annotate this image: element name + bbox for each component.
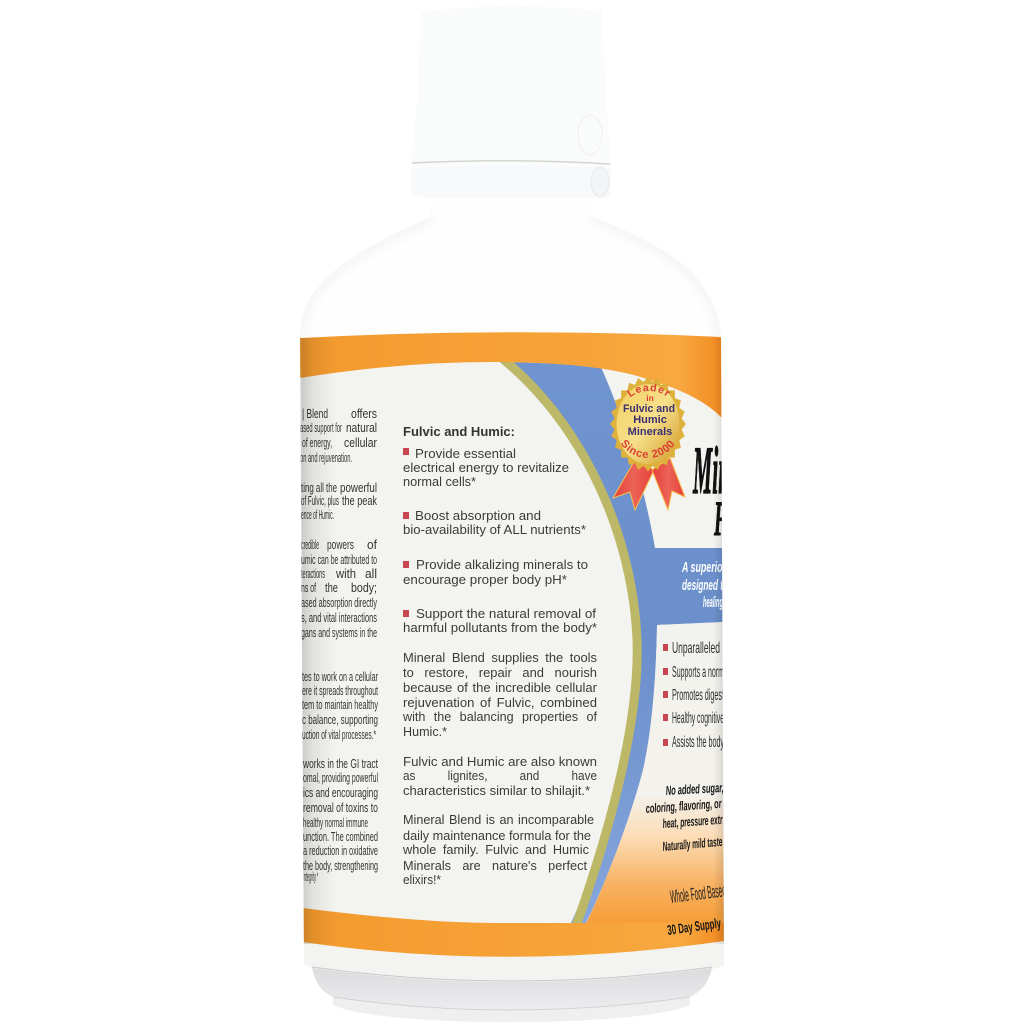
bullet list: electrical energy to revitalize	[403, 460, 569, 475]
left text column: compressed around bottle curve: with	[335, 567, 356, 581]
left text column: compressed around bottle curve: the	[325, 581, 338, 595]
paragraph: lignites: as lignites, and have	[403, 768, 597, 783]
starburst	[610, 376, 686, 472]
paragraph: tools to restore: Humic.*	[403, 724, 447, 739]
olive curved stripe	[504, 360, 637, 926]
left text column: compressed around bottle curve: integrity.*	[303, 870, 318, 884]
bullet list: Support the natural removal of	[416, 606, 596, 621]
bottle cap with shrink seal	[412, 114, 610, 198]
label background panel	[300, 340, 724, 945]
left text column: compressed around bottle curve: of	[367, 538, 377, 552]
left text column: compressed around bottle curve: ence of Humic.	[301, 508, 334, 522]
paragraph: lignites	[403, 754, 597, 798]
left text column: compressed around bottle curve: omal, providing powerful	[303, 771, 378, 785]
paragraph: lignites: Fulvic and Humic are also known	[403, 754, 597, 769]
blue swoosh band	[500, 362, 723, 925]
bottle body: healing	[703, 594, 723, 611]
left text column: compressed around bottle curve: tes to work on a cellular	[302, 670, 378, 684]
paragraph: tools to restore	[402, 650, 598, 739]
heading: Fulvic and Humic: Fulvic and Humic:	[403, 425, 515, 439]
left text column: compressed around bottle curve: all	[365, 567, 377, 581]
left text column: compressed around bottle curve: gans and systems in the	[301, 626, 377, 640]
left text column: compressed around bottle curve: ting all the	[301, 481, 337, 495]
left text column: compressed around bottle curve: powerful	[340, 481, 377, 495]
left text column: compressed around bottle curve: powers	[327, 538, 354, 552]
benefits list	[663, 640, 724, 751]
paragraph: daily maintenance: daily maintenance formula for the	[403, 828, 591, 843]
bullet list: normal cells*	[403, 474, 476, 489]
benefits list: Unparalleled	[672, 640, 720, 657]
bottle body: Assists the body	[672, 734, 724, 751]
paragraph: daily maintenance	[402, 812, 594, 887]
paragraph: tools to restore: because of the incredible cellular	[403, 680, 598, 695]
bullet list: bio-availability of ALL nutrients*	[403, 522, 586, 537]
award badge seal: Fulvic and	[623, 403, 675, 415]
left text column: compressed around bottle curve: body;	[351, 581, 377, 595]
left text column: compressed around bottle curve: offers	[351, 407, 377, 421]
left text column: compressed around bottle curve: ere it spreads throughout	[302, 684, 378, 698]
bottle body: Whole Food Based	[669, 880, 727, 907]
paragraph: lignites: characteristics similar to shilajit.*	[403, 783, 590, 798]
paragraph: daily maintenance: whole family. Fulvic and Humic	[402, 842, 589, 857]
left text column: compressed around bottle curve	[300, 407, 378, 884]
gold disk	[616, 384, 680, 464]
no added sugar statement: Naturally mild taste	[662, 834, 723, 854]
left text column: compressed around bottle curve: of energy,	[302, 436, 332, 450]
center text column	[402, 425, 598, 887]
whole food and supply lines	[667, 886, 724, 935]
left text column: compressed around bottle curve: healthy normal immune	[303, 816, 368, 830]
bottom orange band	[303, 908, 724, 957]
no added sugar statement: heat, pressure extr	[662, 812, 724, 831]
paragraph: daily maintenance: elixirs!*	[403, 872, 441, 887]
left text column: compressed around bottle curve: credible	[301, 538, 319, 552]
bullet list: harmful pollutants from the body*	[403, 620, 597, 635]
left text column: compressed around bottle curve: the body, strengthening	[303, 859, 378, 873]
left text column: compressed around bottle curve: teractions	[301, 567, 325, 581]
left text column: compressed around bottle curve: cellular	[344, 436, 377, 450]
paragraph: tools to restore: with the balancing properties of	[402, 709, 597, 724]
left text column: compressed around bottle curve: | Blend	[302, 407, 328, 421]
paragraph: tools to restore: rejuvenation of Fulvic, combined	[403, 695, 597, 710]
left text column: compressed around bottle curve: works in the GI tract	[302, 757, 378, 771]
bottle product photo	[300, 114, 724, 1022]
paragraph: tools to restore: to restore, repair and nourish	[403, 665, 597, 680]
left text column: compressed around bottle curve: ics and encouraging	[303, 786, 378, 800]
bottle body: Healthy cognitive	[672, 710, 724, 727]
left text column: compressed around bottle curve: natural	[346, 421, 377, 435]
curvature shading on label	[298, 338, 726, 944]
bullet list: Boost absorption and	[415, 508, 541, 523]
left text column: compressed around bottle curve: ased absorption directly	[301, 596, 377, 610]
left text column: compressed around bottle curve: the peak	[342, 494, 378, 508]
left text column: compressed around bottle curve: ased support for	[300, 421, 342, 435]
blue panel tagline: A superior	[681, 559, 727, 576]
left text column: compressed around bottle curve: a reduction in oxidative	[303, 844, 378, 858]
left text column: compressed around bottle curve: of Fulvic, plus	[301, 494, 339, 508]
left text column: compressed around bottle curve: unction. The combined	[303, 830, 378, 844]
award badge seal: Minerals	[628, 426, 672, 438]
award badge seal: Since 2000	[621, 440, 674, 458]
bottle body: Promotes digest	[672, 687, 724, 704]
bullet list: Provide essential	[415, 446, 516, 461]
left text column: compressed around bottle curve: tem to maintain healthy	[302, 698, 378, 712]
bottle shoulder	[300, 199, 721, 340]
top orange band	[300, 332, 722, 418]
left text column: compressed around bottle curve: c balance, supporting	[302, 713, 378, 727]
product title, wrapping out of view	[692, 445, 722, 536]
left text column: compressed around bottle curve: removal of toxins to	[303, 801, 378, 815]
paragraph: daily maintenance: Minerals are nature's perfect	[403, 858, 587, 873]
award badge seal: in	[646, 393, 654, 403]
bottle body	[300, 114, 724, 1022]
no added sugar statement: coloring, flavoring, or	[645, 796, 723, 816]
bottle base	[304, 940, 724, 1022]
seal text: Leader	[626, 384, 670, 397]
bottle product photo: Mineral	[693, 432, 765, 508]
paragraph: tools to restore: Mineral Blend supplies the tools	[403, 650, 597, 665]
whole food and supply lines: 30 Day Supply	[666, 915, 722, 938]
bottle body: Supports a norm	[672, 664, 724, 681]
no added sugar statement	[645, 780, 724, 854]
left text column: compressed around bottle curve: uction of vital processes.*	[302, 728, 376, 742]
left text column: compressed around bottle curve: umic can be attributed to	[301, 553, 377, 567]
blue panel tagline: designed to	[682, 577, 728, 594]
blue panel tagline	[682, 561, 722, 610]
left text column: compressed around bottle curve: ns of	[301, 581, 316, 595]
bullet list	[403, 446, 597, 635]
award badge seal	[610, 376, 686, 512]
lower right panel gradient	[583, 622, 724, 930]
left text column: compressed around bottle curve: on and rejuvenation.	[300, 451, 352, 465]
no added sugar statement: No added sugar,	[665, 780, 724, 798]
bullet list: Provide alkalizing minerals to	[416, 557, 588, 572]
award badge seal: Humic	[633, 414, 667, 426]
product title, wrapping out of view: Fu	[714, 490, 738, 546]
paragraph: daily maintenance: Mineral Blend is an incomparable	[403, 812, 594, 827]
bullet list: encourage proper body pH*	[403, 572, 567, 587]
ribbon	[613, 458, 685, 510]
left text column: compressed around bottle curve: s, and vital interactions	[301, 611, 377, 625]
